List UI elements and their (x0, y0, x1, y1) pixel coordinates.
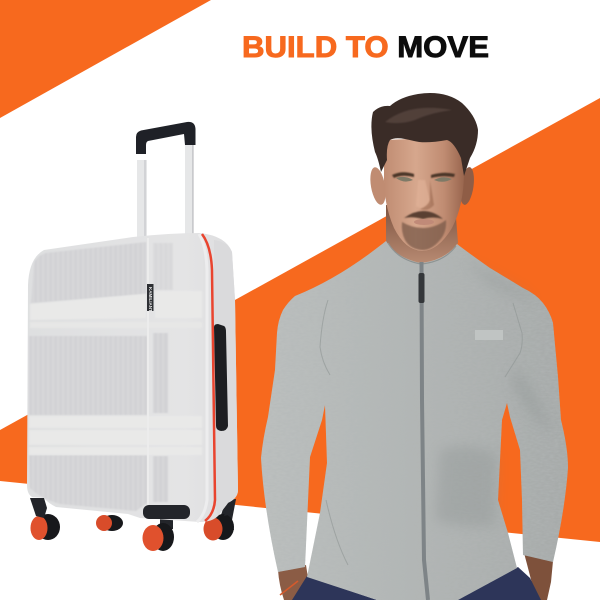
wheel brackets (30, 498, 236, 519)
light horizontal bands (29, 291, 202, 455)
red zip stripe (202, 234, 215, 521)
jacket shading (435, 260, 552, 527)
vertical seam (147, 238, 149, 506)
navy trousers (292, 567, 541, 600)
background: orange corner triangle (0, 0, 211, 118)
face (384, 137, 464, 251)
moustache (404, 211, 443, 219)
collar line (388, 243, 456, 264)
eyes (396, 177, 452, 182)
zipper pull (418, 273, 424, 303)
hands (278, 553, 553, 600)
lips (414, 219, 434, 225)
hair (371, 93, 478, 176)
wrist band (280, 581, 298, 595)
background: orange diagonal band (0, 98, 600, 542)
title: BUILD TO MOVE: BUILD TO MOVE (242, 31, 489, 64)
wheels (30, 499, 236, 551)
nose (416, 180, 431, 209)
head (368, 137, 476, 251)
zipper (422, 262, 428, 600)
lower ribbed panel (29, 336, 147, 415)
handle grip (136, 122, 196, 154)
bottom ribbed panel (29, 455, 147, 511)
side panel edge (197, 234, 207, 522)
brand tag (147, 284, 154, 312)
chest logo patch (475, 330, 503, 340)
right side panel (214, 240, 238, 516)
suitcase shell (27, 233, 238, 522)
ears (368, 166, 388, 206)
man in grey jacket (261, 93, 568, 600)
side ribbed panels (153, 243, 173, 502)
beard (402, 220, 446, 250)
side carry handle (214, 324, 228, 431)
telescopic handle poles (137, 145, 194, 238)
brand tag: KAMILIANT (148, 287, 153, 312)
neck (386, 205, 458, 263)
upper ribbed panel (31, 242, 146, 303)
raglan seams (320, 300, 522, 565)
nose shadow (420, 180, 434, 210)
hair highlight (385, 108, 452, 123)
eyebrows (392, 172, 455, 178)
suitcase illustration (27, 122, 238, 551)
jacket (261, 241, 568, 600)
